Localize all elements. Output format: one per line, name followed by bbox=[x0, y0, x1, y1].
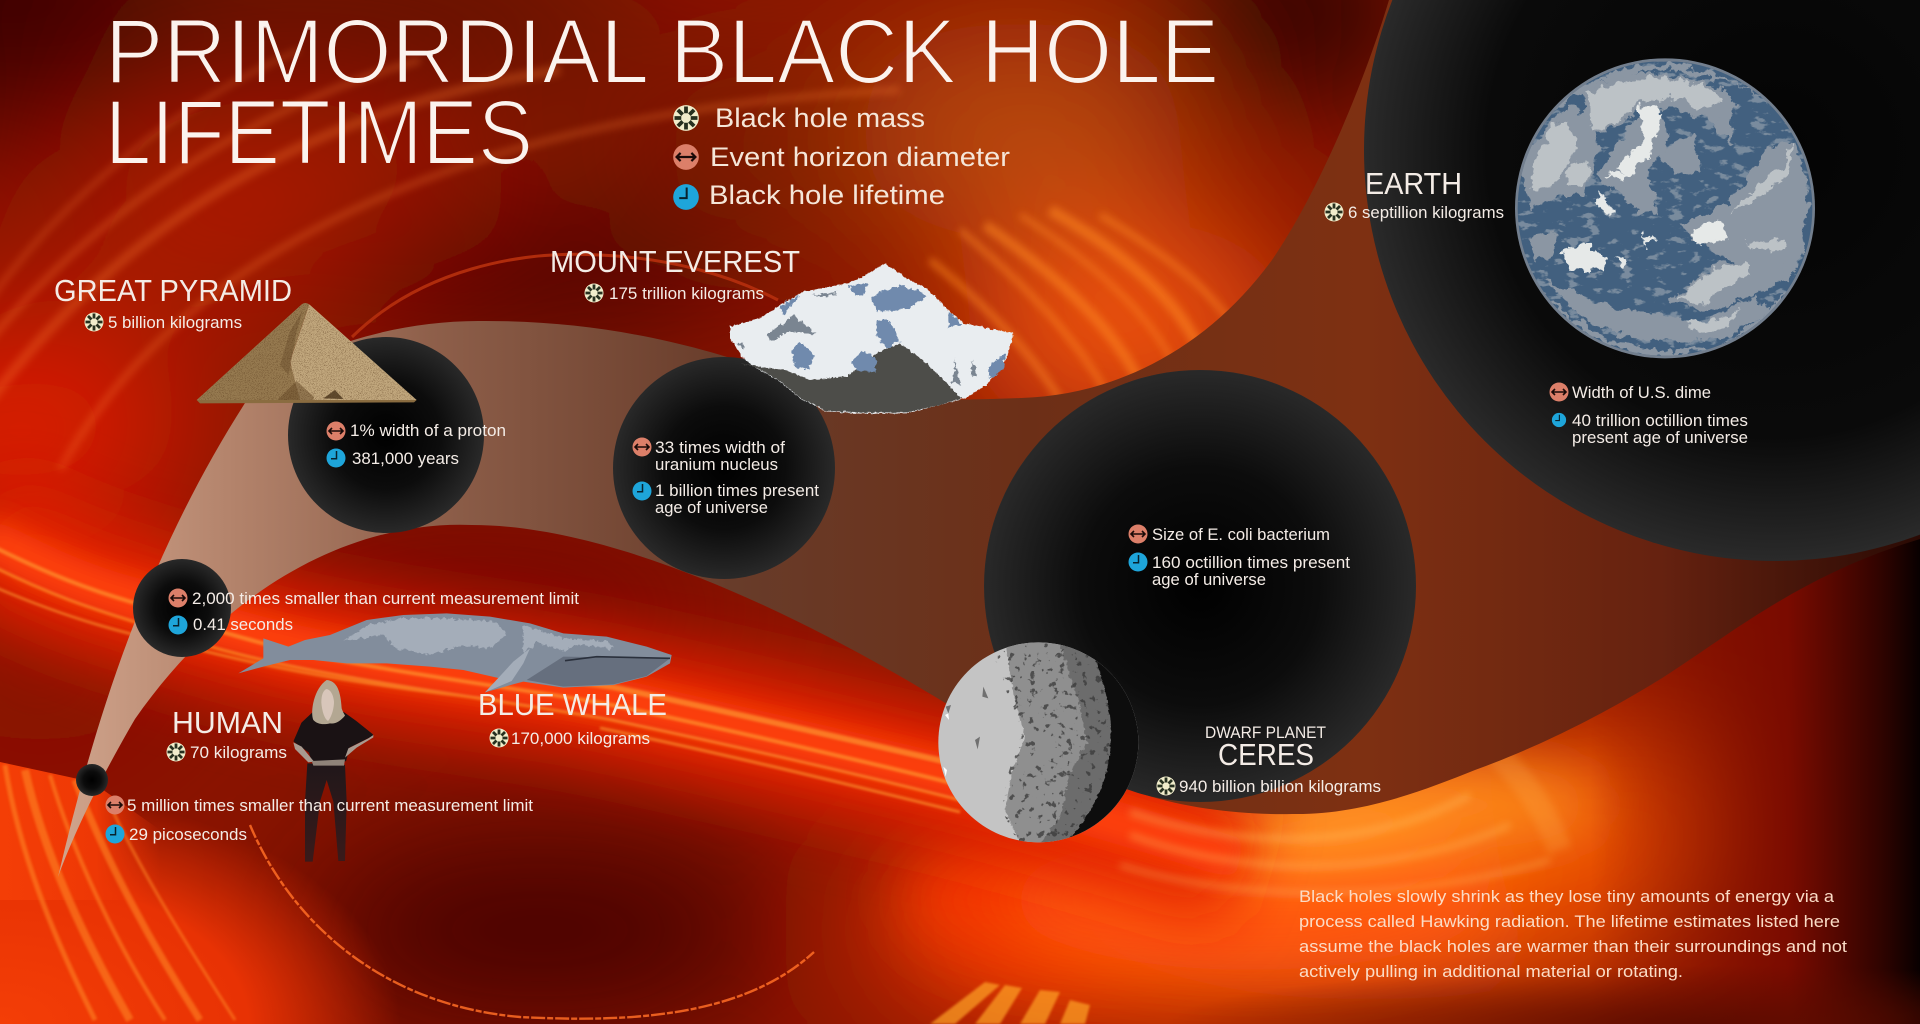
Earth image bbox=[1515, 58, 1817, 362]
stats: Ceres black hole: Size of E. coli bacterium bbox=[1152, 526, 1330, 544]
title: PRIMORDIAL BLACK HOLE bbox=[105, 1, 1219, 103]
label: Blue Whale: BLUE WHALE bbox=[478, 688, 667, 722]
right and bottom falloff bbox=[1590, 520, 1920, 1024]
stats: Mount Everest black hole: uranium nucleus bbox=[655, 456, 778, 474]
legend bbox=[673, 103, 1010, 210]
explanatory paragraph: process called Hawking radiation. The lifetime estimates listed here bbox=[1299, 912, 1840, 931]
stats: Ceres black hole: age of universe bbox=[1152, 571, 1266, 589]
lower left stripes bbox=[0, 762, 400, 1024]
label: Great Pyramid: GREAT PYRAMID bbox=[54, 274, 292, 308]
label: Mount Everest: MOUNT EVEREST bbox=[550, 245, 800, 279]
stats: Great Pyramid black hole: 381,000 years bbox=[352, 450, 459, 468]
stats: Mount Everest black hole: 33 times width of bbox=[655, 439, 785, 457]
stats: blue whale black hole bbox=[168, 588, 579, 634]
label: Great Pyramid: 5 billion kilograms bbox=[108, 314, 242, 332]
legend: black hole lifetime: Black hole lifetime bbox=[709, 180, 945, 210]
label: Human: HUMAN bbox=[172, 706, 283, 740]
explanatory paragraph: Black holes slowly shrink as they lose tiny amounts of energy via a bbox=[1299, 887, 1835, 906]
stats: Great Pyramid black hole: 1% width of a proton bbox=[350, 422, 506, 440]
stats: Earth black hole bbox=[1550, 382, 1748, 447]
bright diagonal streak bbox=[0, 535, 1240, 860]
human figure bbox=[293, 680, 373, 862]
label: dwarf planet Ceres bbox=[1156, 723, 1381, 796]
title bbox=[105, 1, 1219, 184]
explanatory paragraph bbox=[1299, 887, 1847, 981]
stats: human black hole: 29 picoseconds bbox=[129, 826, 247, 844]
bottom edge streaks bbox=[930, 982, 1090, 1024]
Great Pyramid image bbox=[195, 302, 418, 403]
legend: black hole mass: Black hole mass bbox=[715, 103, 925, 133]
legend: event horizon diameter: Event horizon diameter bbox=[710, 142, 1010, 172]
stats: Earth black hole: Width of U.S. dime bbox=[1572, 384, 1711, 402]
black hole: blue whale mass bbox=[133, 559, 231, 657]
blue whale image bbox=[238, 613, 672, 692]
explanatory paragraph: assume the black holes are warmer than their surroundings and not bbox=[1299, 937, 1847, 956]
stats: Ceres black hole bbox=[1128, 524, 1350, 589]
upper left streaks bbox=[0, 50, 900, 470]
stats: Ceres black hole: 160 octillion times present bbox=[1152, 554, 1350, 572]
label: Earth bbox=[1324, 167, 1504, 222]
Mount Everest image bbox=[730, 263, 1013, 413]
label: Human bbox=[166, 706, 287, 762]
thin photon ring arcs bbox=[250, 254, 814, 1019]
label: Earth: EARTH bbox=[1365, 167, 1462, 201]
label: Blue Whale bbox=[478, 688, 667, 748]
stats: Mount Everest black hole: age of universe bbox=[655, 499, 768, 517]
stats: Great Pyramid black hole bbox=[326, 422, 506, 468]
label: Blue Whale: 170,000 kilograms bbox=[511, 730, 650, 748]
lower right swirl bbox=[1120, 740, 1560, 893]
stats: blue whale black hole: 2,000 times smaller than current measurement limit bbox=[192, 590, 579, 608]
stats: Mount Everest black hole: 1 billion times present bbox=[655, 482, 819, 500]
label: Earth: 6 septillion kilograms bbox=[1348, 204, 1504, 222]
label: Great Pyramid bbox=[54, 274, 292, 332]
stats: blue whale black hole: 0.41 seconds bbox=[193, 616, 293, 634]
stats: Earth black hole: 40 trillion octillion times bbox=[1572, 412, 1748, 430]
black hole: human mass bbox=[76, 764, 108, 796]
label: Human: 70 kilograms bbox=[190, 744, 287, 762]
stats: human black hole: 5 million times smaller than current measurement limit bbox=[127, 797, 533, 815]
Ceres image bbox=[938, 642, 1138, 842]
label: Mount Everest bbox=[550, 245, 800, 303]
title: LIFETIMES bbox=[105, 82, 533, 184]
stats: human black hole bbox=[106, 796, 533, 844]
black hole: Mount Everest mass bbox=[613, 357, 835, 579]
explanatory paragraph: actively pulling in additional material or rotating. bbox=[1299, 962, 1683, 981]
label: dwarf planet Ceres: 940 billion billion kilograms bbox=[1179, 778, 1381, 796]
stats: Earth black hole: present age of universe bbox=[1572, 429, 1748, 447]
black hole: Great Pyramid mass bbox=[288, 337, 484, 533]
black hole: Earth mass bbox=[1364, 0, 1920, 561]
label: dwarf planet Ceres: CERES bbox=[1218, 738, 1314, 772]
stats: Mount Everest black hole bbox=[632, 438, 819, 517]
black hole: Ceres mass bbox=[984, 370, 1416, 802]
label: dwarf planet Ceres: DWARF PLANET bbox=[1205, 723, 1326, 742]
label: Mount Everest: 175 trillion kilograms bbox=[609, 285, 764, 303]
upper right curved streaks bbox=[930, 210, 1235, 400]
